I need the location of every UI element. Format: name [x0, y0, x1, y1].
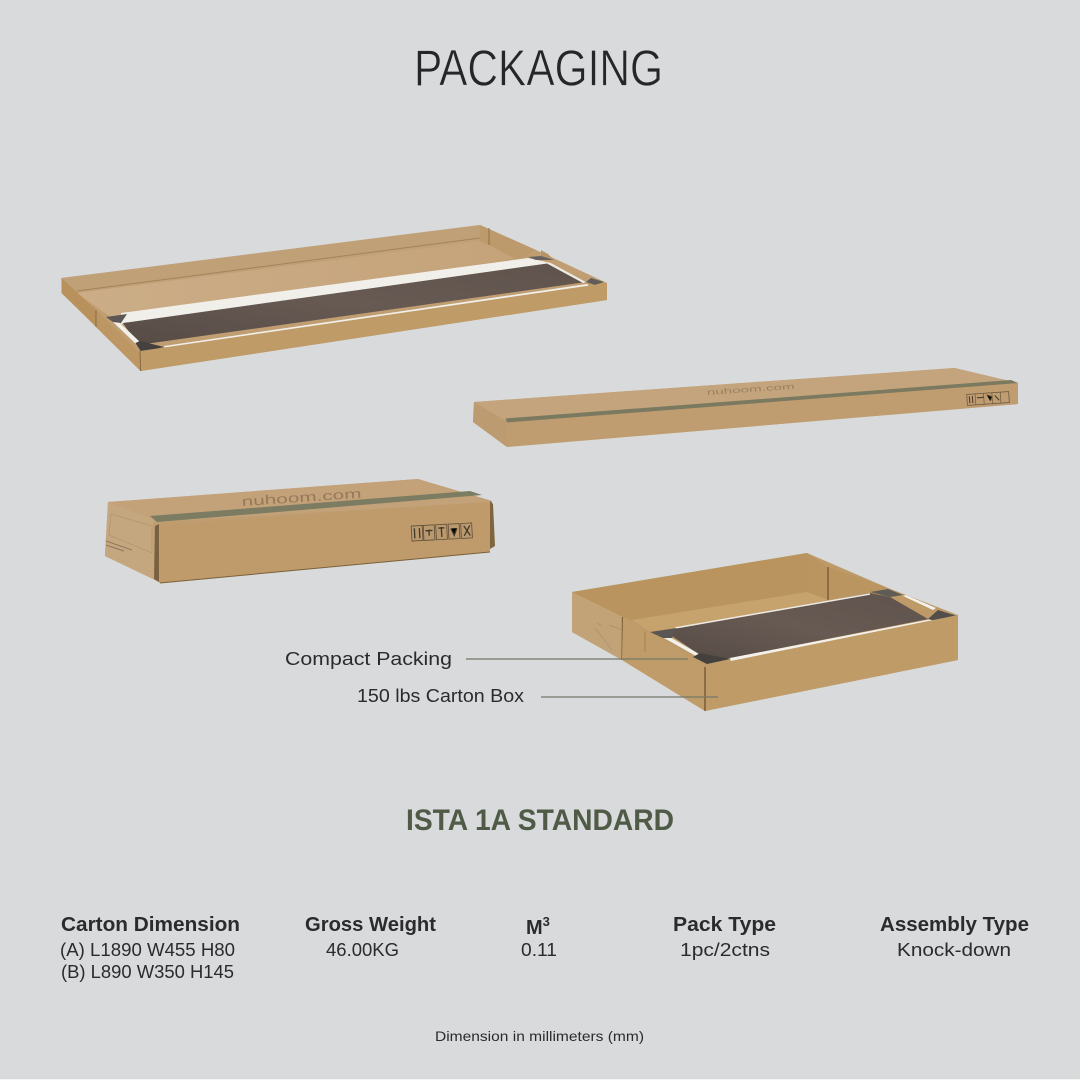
- spec: cubic metres: M: [526, 917, 543, 939]
- illustration: closed compact carton: [105, 479, 495, 583]
- illustration: closed flat long carton: [473, 368, 1018, 447]
- spec: cubic metres: 0.11: [521, 939, 557, 960]
- spec: pack type: Pack Type: [673, 914, 776, 936]
- spec: carton dimension: (A) L1890 W455 H80: [60, 939, 235, 960]
- heading: standard: ISTA 1A STANDARD: [406, 804, 674, 837]
- spec: carton dimension: (B) L890 W350 H145: [61, 961, 234, 982]
- spec: gross weight: Gross Weight: [305, 914, 436, 936]
- spec: assembly type: [880, 914, 1029, 960]
- spec: pack type: [673, 914, 776, 960]
- callout: compact packing: Compact Packing: [285, 648, 452, 669]
- spec: carton dimension: Carton Dimension: [61, 914, 240, 936]
- printed brand on carton: nuhoom.com: [241, 486, 362, 509]
- spec: gross weight: [305, 914, 436, 960]
- icon: handling marks: [967, 392, 1009, 405]
- spec: assembly type: Assembly Type: [880, 914, 1029, 936]
- title: PACKAGING: [414, 40, 663, 96]
- spec: carton dimension: [60, 914, 240, 982]
- illustration: open compact tray box: [572, 553, 958, 711]
- printed brand on carton: nuhoom.com: [707, 382, 796, 397]
- spec: assembly type: Knock-down: [897, 939, 1011, 960]
- spec: cubic metres: 3: [543, 914, 550, 929]
- callout: carton box: 150 lbs Carton Box: [357, 685, 525, 706]
- illustration: open long tray box: [62, 225, 607, 371]
- spec: cubic metres: [521, 914, 557, 960]
- icon: handling marks: [411, 522, 472, 541]
- spec: gross weight: 46.00KG: [326, 939, 399, 960]
- spec: pack type: 1pc/2ctns: [680, 939, 770, 960]
- footnote: Dimension in millimeters (mm): [435, 1028, 644, 1044]
